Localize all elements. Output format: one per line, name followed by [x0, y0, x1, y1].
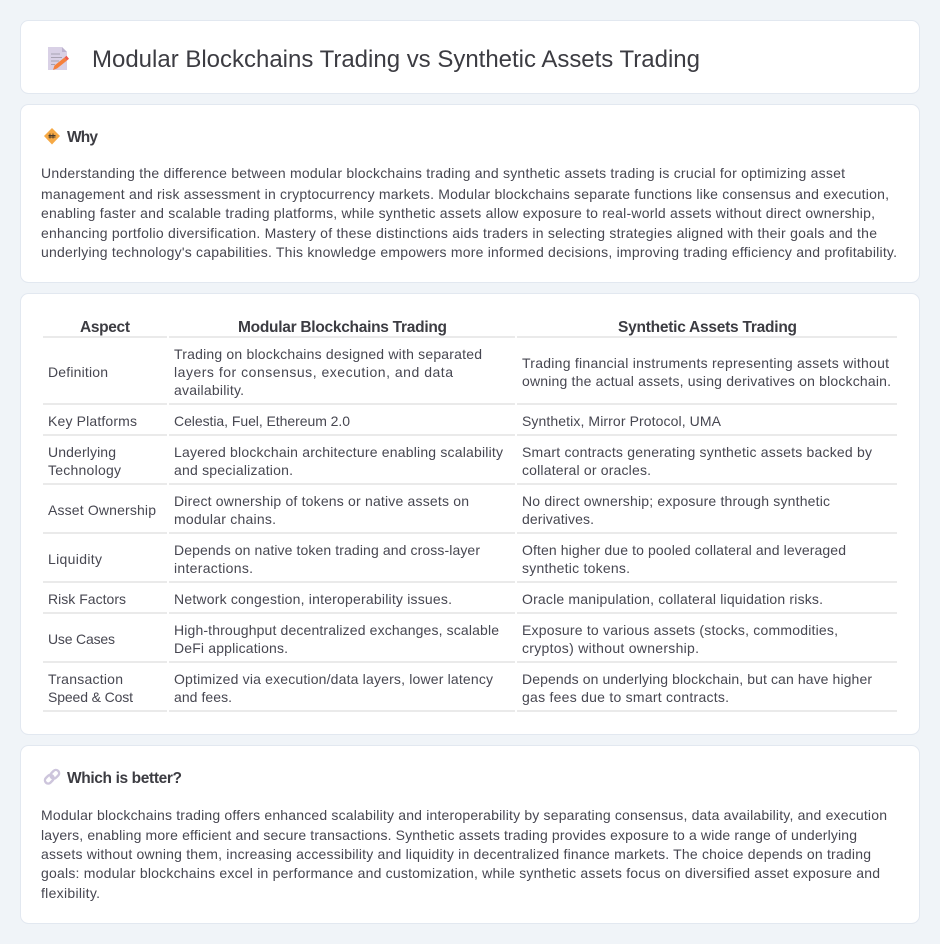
table row: key platforms: Celestia, Fuel, Ethereum 2.0 — [174, 413, 350, 429]
table row: transaction speed and cost: Optimized via execution/data layers, lower latency — [174, 671, 493, 687]
table row: underlying technology: Layered blockchain architecture enabling scalability — [174, 444, 503, 460]
table row: definition: Trading on blockchains designed with separated — [174, 346, 482, 362]
table row: key platforms: Key Platforms — [48, 413, 137, 429]
text block: why explanation: Understanding the difference between modular blockchains trading and synthetic assets trading is crucial for optimizing asset — [41, 165, 845, 181]
table row: definition: availability. — [174, 382, 244, 398]
table row: underlying technology: Technology — [48, 462, 121, 478]
text block: which is better explanation: assets without owning them, increasing accessibility and liquidity in decentralized finance markets. The choice depends on trading — [41, 846, 871, 862]
table header row: Modular Blockchains Trading — [238, 319, 447, 336]
title: Modular Blockchains Trading vs Synthetic Assets Trading — [92, 46, 700, 73]
table row: liquidity: Often higher due to pooled collateral and leveraged — [522, 542, 846, 558]
table row: asset ownership: modular chains. — [174, 511, 276, 527]
panel: which is better — [20, 746, 920, 924]
table row: use cases — [43, 622, 897, 662]
table row: definition: Definition — [48, 364, 108, 380]
table row: asset ownership — [43, 493, 897, 533]
heading: which is better: Which is better? — [67, 770, 182, 787]
table row: use cases: cryptos) without ownership. — [522, 640, 699, 656]
icon: orange diamond sign — [44, 128, 60, 144]
table row: liquidity — [43, 542, 897, 582]
table row: liquidity: Depends on native token trading and cross-layer — [174, 542, 480, 558]
text block: why explanation: enhancing portfolio diversification. Mastery of these distinctions aids traders in selecting strategies aligned with their goals and the — [41, 225, 877, 241]
text block: why explanation — [41, 165, 897, 260]
table row: asset ownership: derivatives. — [522, 511, 594, 527]
table row: transaction speed and cost: gas fees due to smart contracts. — [522, 689, 729, 705]
panel: why — [20, 104, 920, 282]
table row: liquidity: interactions. — [174, 560, 253, 576]
table row: asset ownership: Asset Ownership — [48, 502, 156, 518]
table row: asset ownership: No direct ownership; exposure through synthetic — [522, 493, 830, 509]
table row: transaction speed and cost: Transaction — [48, 671, 123, 687]
icon: document with pencil — [48, 47, 69, 70]
text block: why explanation: underlying technology's capabilities. This knowledge empowers more informed decisions, improving trading efficiency and profitability. — [41, 244, 897, 260]
table row: risk factors: Risk Factors — [48, 591, 126, 607]
text block: which is better explanation: flexibility. — [41, 885, 100, 901]
icon: chain link — [44, 769, 60, 785]
table row: underlying technology: collateral or oracles. — [522, 462, 651, 478]
table row: risk factors: Oracle manipulation, collateral liquidation risks. — [522, 591, 823, 607]
table row: key platforms: Synthetix, Mirror Protocol, UMA — [522, 413, 722, 429]
heading: why: Why — [67, 129, 98, 146]
panel: comparison table — [20, 294, 920, 734]
table row: definition: Trading financial instruments representing assets without — [522, 355, 889, 371]
table row: transaction speed and cost: Speed & Cost — [48, 689, 133, 705]
table header row — [43, 319, 897, 337]
text block: which is better explanation — [41, 807, 887, 901]
table row: underlying technology: Smart contracts generating synthetic assets backed by — [522, 444, 872, 460]
table row: definition: layers for consensus, execution, and data — [174, 364, 453, 380]
table row: liquidity: synthetic tokens. — [522, 560, 630, 576]
table row: underlying technology — [43, 444, 897, 484]
text block: which is better explanation: layers, enabling more efficient and secure transactions. Synthetic assets trading provides exposure to a wide range of underlying — [41, 827, 857, 843]
table row: use cases: Use Cases — [48, 631, 115, 647]
table row: definition — [43, 346, 897, 404]
table row: risk factors — [43, 591, 897, 613]
table row: key platforms — [43, 413, 897, 435]
table row: underlying technology: and specialization. — [174, 462, 293, 478]
text block: which is better explanation: goals: modular blockchains excel in performance and customization, while synthetic assets focus on diversified asset exposure and — [41, 865, 880, 881]
table row: asset ownership: Direct ownership of tokens or native assets on — [174, 493, 469, 509]
table row: transaction speed and cost: Depends on underlying blockchain, but can have higher — [522, 671, 872, 687]
table row: transaction speed and cost: and fees. — [174, 689, 232, 705]
table row: transaction speed and cost — [43, 671, 897, 711]
panel: title header — [20, 20, 920, 94]
table header row: Synthetic Assets Trading — [618, 319, 797, 336]
table row: risk factors: Network congestion, interoperability issues. — [174, 591, 452, 607]
text block: which is better explanation: Modular blockchains trading offers enhanced scalability and interoperability by separating consensus, data availability, and execution — [41, 807, 887, 823]
table header row: Aspect — [80, 319, 130, 336]
table row: use cases: High-throughput decentralized exchanges, scalable — [174, 622, 499, 638]
text block: why explanation: management and risk assessment in cryptocurrency markets. Modular blockchains separate functions like consensus and execution, — [41, 186, 889, 202]
text block: why explanation: enabling faster and scalable trading platforms, while synthetic assets allow exposure to real-world assets without direct ownership, — [41, 205, 875, 221]
table row: liquidity: Liquidity — [48, 551, 102, 567]
table row: underlying technology: Underlying — [48, 444, 116, 460]
table row: definition: owning the actual assets, using derivatives on blockchain. — [522, 373, 891, 389]
table row: use cases: DeFi applications. — [174, 640, 288, 656]
table row: use cases: Exposure to various assets (stocks, commodities, — [522, 622, 838, 638]
